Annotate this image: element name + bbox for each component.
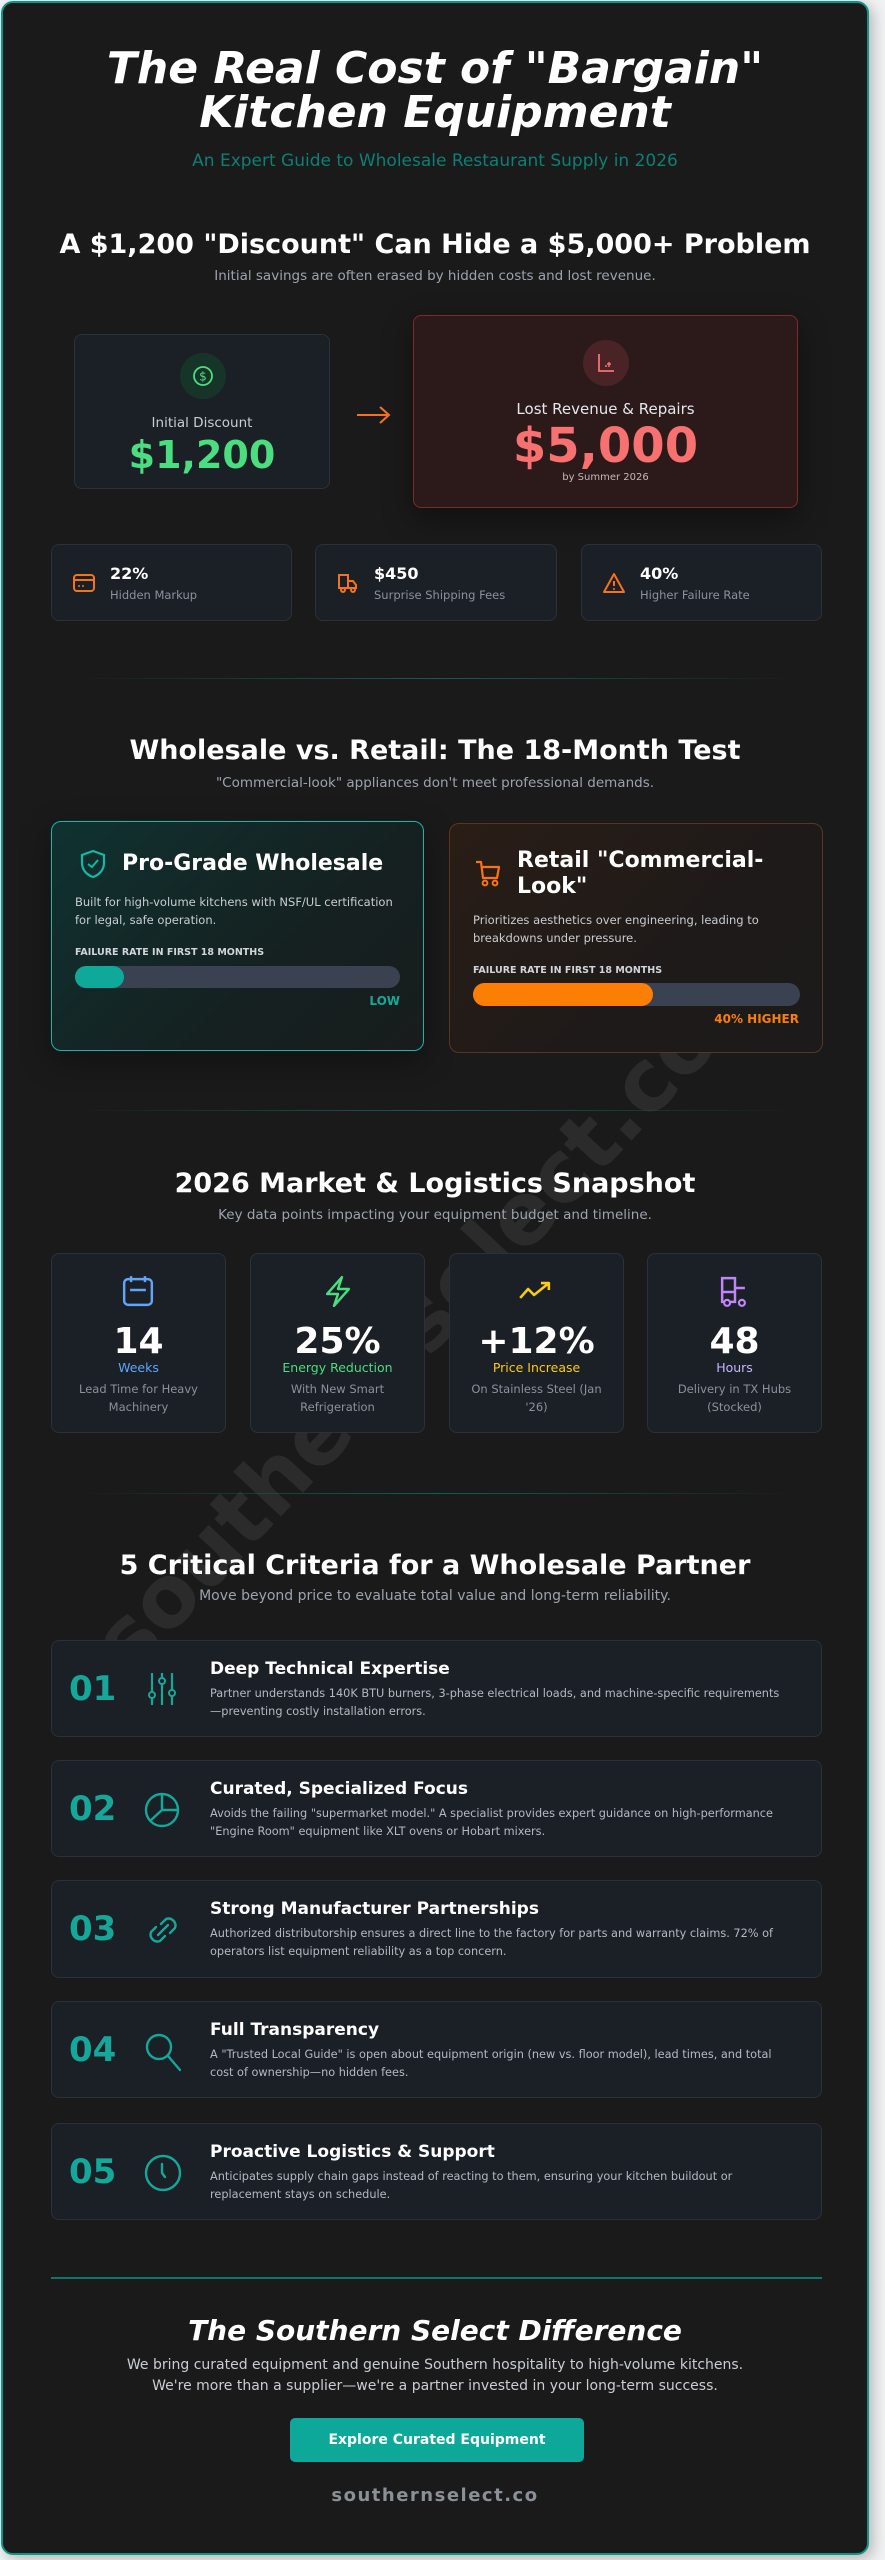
- bar chart: [75, 966, 400, 988]
- criterion 05: Anticipates supply chain gaps instead of reacting to them, ensuring your kitchen buildout or replacement stays on schedule.: [210, 2170, 732, 2201]
- icon: search: [146, 2034, 182, 2072]
- section 3 heading: 2026 Market & Logistics Snapshot: [175, 1168, 695, 1199]
- criterion 01: 01: [69, 1669, 116, 1709]
- stat: hidden markup: 22%: [110, 564, 148, 583]
- bar chart: [473, 983, 800, 1006]
- criterion 03: Authorized distributorship ensures a direct line to the factory for parts and warranty claims. 72% of operators list equipment reliability as a top concern.: [210, 1927, 773, 1958]
- icon: sliders: [148, 1673, 176, 1705]
- panel: pro-grade wholesale: Built for high-volume kitchens with NSF/UL certification for legal, safe operation.: [75, 895, 393, 927]
- icon: chart: [583, 340, 629, 386]
- footer text: [127, 2357, 743, 2394]
- criterion 05: [51, 2123, 822, 2220]
- criterion 01: Partner understands 140K BTU burners, 3-phase electrical loads, and machine-specific requirements: [210, 1687, 779, 1700]
- criterion 03: 03: [69, 1909, 116, 1949]
- panel: retail: 40% HIGHER: [714, 1012, 799, 1026]
- icon: trend: [519, 1282, 550, 1299]
- icon: truck: [720, 1276, 746, 1307]
- icon: cart: [476, 860, 500, 886]
- icon: card: [73, 574, 95, 592]
- panel: pro-grade wholesale: FAILURE RATE IN FIRST 18 MONTHS: [75, 947, 264, 958]
- criterion 02: Curated, Specialized Focus: [210, 1779, 468, 1799]
- criterion 04: [51, 2001, 822, 2098]
- icon: dollar: [180, 353, 226, 399]
- section 4 subtitle: Move beyond price to evaluate total value and long-term reliability.: [199, 1588, 671, 1604]
- icon: calendar: [122, 1276, 154, 1306]
- label: Initial Discount: [152, 415, 252, 431]
- icon: bolt: [326, 1276, 350, 1308]
- footer text: We bring curated equipment and genuine Southern hospitality to high-volume kitchens.: [127, 2357, 743, 2373]
- stat card: price: Price Increase: [493, 1360, 580, 1375]
- panel: pro-grade wholesale: LOW: [369, 994, 400, 1008]
- stat: failure: [581, 544, 822, 621]
- stat card: hours: 48: [709, 1321, 760, 1362]
- stat card: hours: Delivery in TX Hubs (Stocked): [678, 1382, 791, 1414]
- title: [107, 43, 763, 138]
- section 3 subtitle: Key data points impacting your equipment budget and timeline.: [218, 1207, 652, 1223]
- icon: shield: [80, 850, 106, 878]
- stat card: price: +12%: [478, 1321, 595, 1362]
- arrow: [357, 406, 390, 424]
- icon: link: [149, 1917, 177, 1943]
- stat card: hours: [647, 1253, 822, 1433]
- label: Lost Revenue & Repairs: [516, 400, 695, 418]
- footer heading: The Southern Select Difference: [188, 2314, 682, 2347]
- icon: clock: [144, 2154, 182, 2192]
- criterion 01: —preventing costly installation errors.: [210, 1705, 426, 1718]
- criterion 02: Avoids the failing "supermarket model." A specialist provides expert guidance on high-performance "Engine Room" equipment like XLT ovens or Hobart mixers.: [210, 1807, 773, 1838]
- panel: retail: FAILURE RATE IN FIRST 18 MONTHS: [473, 965, 662, 976]
- stat: failure: 40%: [640, 564, 678, 583]
- title: The Real Cost of "Bargain": [107, 43, 763, 94]
- stat card: energy: With New Smart Refrigeration: [291, 1382, 384, 1414]
- criterion 05: 05: [69, 2152, 116, 2192]
- stat card: price: On Stainless Steel (Jan '26): [471, 1382, 602, 1414]
- section 2 subtitle: "Commercial-look" appliances don't meet professional demands.: [216, 775, 654, 791]
- stat: shipping: $450: [374, 564, 419, 583]
- icon: dollar: $: [199, 370, 207, 384]
- criterion 04: 04: [69, 2030, 116, 2070]
- button: Explore Curated Equipment: [328, 2432, 546, 2448]
- stat card: weeks: Weeks: [118, 1360, 159, 1375]
- stat card: weeks: Lead Time for Heavy Machinery: [79, 1382, 198, 1414]
- stat card: energy: Energy Reduction: [282, 1360, 393, 1375]
- panel: retail: Prioritizes aesthetics over engineering, leading to breakdowns under pressure.: [473, 913, 759, 945]
- section 2 heading: Wholesale vs. Retail: The 18-Month Test: [129, 735, 741, 766]
- icon: pie: [144, 1792, 180, 1828]
- criterion 01: [51, 1640, 822, 1737]
- criterion 05: Proactive Logistics & Support: [210, 2142, 495, 2162]
- stat: hidden markup: [51, 544, 292, 621]
- stat: shipping: [315, 544, 557, 621]
- stat card: hours: Hours: [716, 1360, 753, 1375]
- stat: hidden markup: Hidden Markup: [110, 588, 197, 602]
- watermark: southernselect.co: [73, 989, 738, 1692]
- icon: warning: [603, 573, 625, 593]
- criterion 04: Full Transparency: [210, 2020, 379, 2040]
- stat card: weeks: 14: [113, 1321, 164, 1362]
- stat card: weeks: [51, 1253, 226, 1433]
- title: Kitchen Equipment: [199, 87, 671, 138]
- criterion 02: [51, 1760, 822, 1857]
- stat: shipping: Surprise Shipping Fees: [374, 588, 505, 602]
- section 1 subtitle: Initial savings are often erased by hidden costs and lost revenue.: [214, 268, 656, 284]
- website: southernselect.co: [331, 2485, 539, 2506]
- panel: pro-grade wholesale: [51, 821, 424, 1051]
- section 1 heading: A $1,200 "Discount" Can Hide a $5,000+ Problem: [59, 229, 811, 260]
- footer text: We're more than a supplier—we're a partner invested in your long-term success.: [152, 2378, 718, 2394]
- stat: failure: Higher Failure Rate: [640, 588, 750, 602]
- section 4 heading: 5 Critical Criteria for a Wholesale Partner: [120, 1550, 750, 1581]
- panel: lost revenue: [413, 315, 798, 508]
- criterion 04: A "Trusted Local Guide" is open about equipment origin (new vs. floor model), lead times, and total cost of ownership—no hidden fees.: [210, 2048, 772, 2079]
- criterion 02: 02: [69, 1789, 116, 1829]
- panel: retail: [449, 823, 823, 1053]
- panel: retail: Retail "Commercial-: [517, 848, 763, 873]
- note: by Summer 2026: [562, 472, 649, 483]
- panel: initial discount: [74, 334, 330, 489]
- button: [290, 2418, 584, 2462]
- value: $5,000: [513, 418, 698, 474]
- panel: pro-grade wholesale: Pro-Grade Wholesale: [122, 851, 383, 876]
- icon: truck: [338, 574, 357, 593]
- stat card: energy: [250, 1253, 425, 1433]
- criterion 03: [51, 1880, 822, 1978]
- stat card: energy: 25%: [294, 1321, 381, 1362]
- subtitle: An Expert Guide to Wholesale Restaurant Supply in 2026: [192, 151, 678, 171]
- panel: retail: Look": [517, 874, 587, 899]
- criterion 03: Strong Manufacturer Partnerships: [210, 1899, 539, 1919]
- stat card: price: [449, 1253, 624, 1433]
- value: $1,200: [129, 433, 275, 477]
- criterion 01: Deep Technical Expertise: [210, 1659, 450, 1679]
